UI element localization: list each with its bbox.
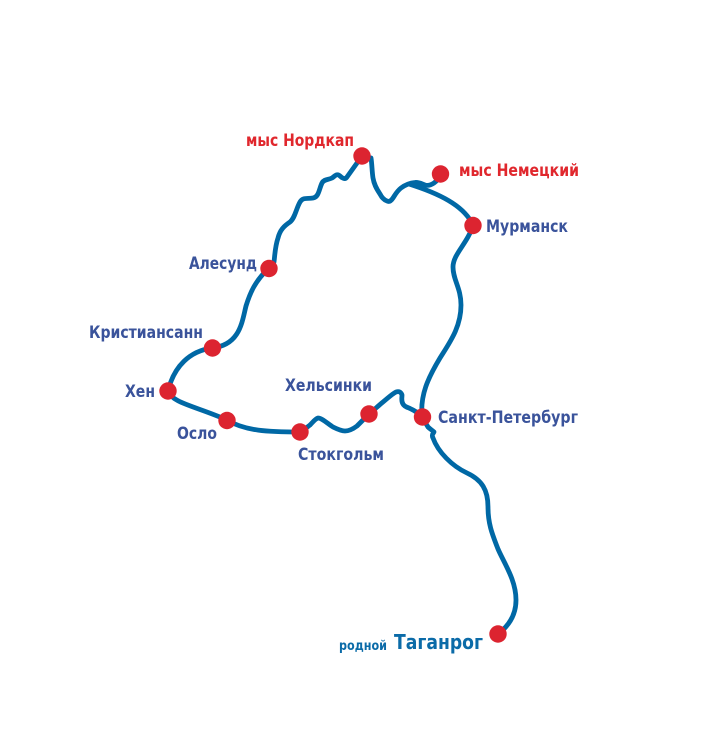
stop: Мыс Немецкий bbox=[432, 161, 579, 183]
stop: Осло: Осло bbox=[177, 424, 217, 443]
stop: Стокгольм bbox=[291, 423, 384, 464]
route line bbox=[168, 156, 516, 634]
stop: Осло bbox=[177, 412, 236, 443]
stop: родной Таганрог: родной bbox=[339, 639, 387, 654]
stop: Мыс Нордкап: мыс Нордкап bbox=[246, 131, 354, 150]
stop: Хельсинки: Хельсинки bbox=[285, 376, 372, 395]
stop: родной Таганрог: Таганрог bbox=[394, 630, 483, 654]
stop: родной Таганрог bbox=[339, 625, 507, 654]
stop: Хен: Хен bbox=[125, 382, 155, 401]
stop: Кристиансанн bbox=[89, 323, 221, 357]
stop: Хельсинки bbox=[285, 376, 378, 423]
stop: Мурманск bbox=[464, 217, 568, 236]
stop: Стокгольм: Стокгольм bbox=[298, 445, 384, 464]
stop: Хен bbox=[125, 382, 177, 401]
stop: Санкт-Петербург: Санкт-Петербург bbox=[438, 408, 578, 427]
stop: Мыс Нордкап bbox=[246, 131, 371, 165]
stop: Алесунд: Алесунд bbox=[189, 254, 257, 273]
stop: Мурманск: Мурманск bbox=[486, 217, 568, 236]
stop: Мыс Немецкий: мыс Немецкий bbox=[459, 161, 579, 180]
stop: Кристиансанн: Кристиансанн bbox=[89, 323, 203, 342]
